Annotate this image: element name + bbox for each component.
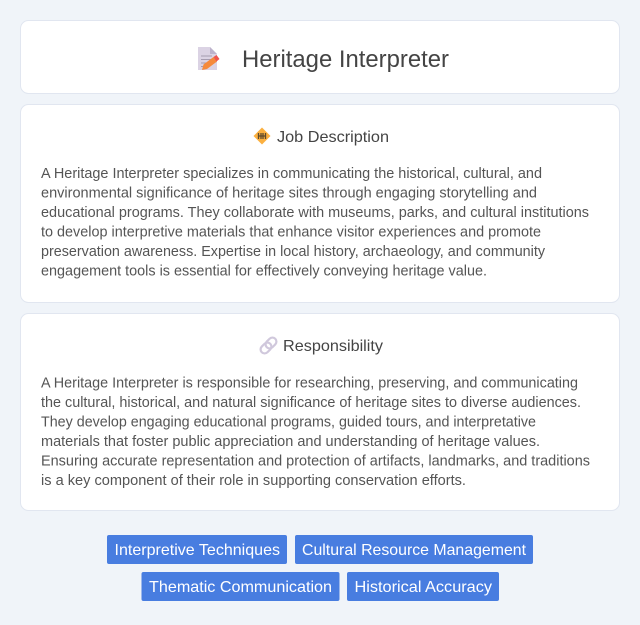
text block: responsibility: the cultural, historical, and natural significance of heritage sites to diverse audiences.: [41, 395, 581, 411]
text block: responsibility: A Heritage Interpreter is responsible for researching, preserving, and communicating: [41, 376, 578, 392]
tag: Thematic Communication: Thematic Communication: [149, 579, 332, 596]
tag: Historical Accuracy: Historical Accuracy: [354, 579, 492, 596]
icon: document with pencil: [198, 47, 220, 70]
text block: job description: engagement tools is essential for effectively conveying heritage value.: [41, 264, 487, 280]
tag: Cultural Resource Management: [295, 535, 533, 564]
header panel: [20, 20, 620, 94]
icon: chain link: [259, 336, 278, 355]
heading: job description: Job Description: [277, 129, 389, 146]
tag: Interpretive Techniques: [107, 535, 287, 564]
text block: responsibility: materials that foster public appreciation and understanding of heritage values.: [41, 434, 540, 450]
tag: Cultural Resource Management: Cultural Resource Management: [302, 542, 527, 559]
tag: Interpretive Techniques: Interpretive Techniques: [114, 542, 280, 559]
text block: job description: to develop interpretive materials that enhance visitor experiences and promote: [41, 224, 541, 240]
text block: job description: preservation awareness. Expertise in local history, archaeology, and community: [41, 244, 546, 260]
text block: responsibility: They develop engaging educational programs, guided tours, and interpretative: [41, 414, 536, 430]
text block: responsibility: Ensuring accurate representation and protection of artifacts, landmarks, and traditions: [41, 454, 590, 470]
text block: job description: environmental significance of heritage sites through engaging storytelling and: [41, 186, 537, 202]
text block: job description: A Heritage Interpreter specializes in communicating the historical, cultural, and: [41, 166, 542, 182]
text block: job description: [41, 166, 589, 280]
icon: diamond sign: [254, 128, 270, 144]
panel: responsibility: [20, 314, 620, 510]
text block: job description: educational programs. They collaborate with museums, parks, and cultural institutions: [41, 205, 589, 221]
title: Heritage Interpreter: [242, 46, 449, 73]
heading: responsibility: Responsibility: [283, 338, 383, 355]
text block: responsibility: [41, 376, 590, 489]
tag: Thematic Communication: [142, 572, 340, 601]
tag: Historical Accuracy: [347, 572, 499, 601]
text block: responsibility: is a key component of their role in supporting conservation efforts.: [41, 473, 466, 489]
panel: job description: [20, 104, 620, 302]
